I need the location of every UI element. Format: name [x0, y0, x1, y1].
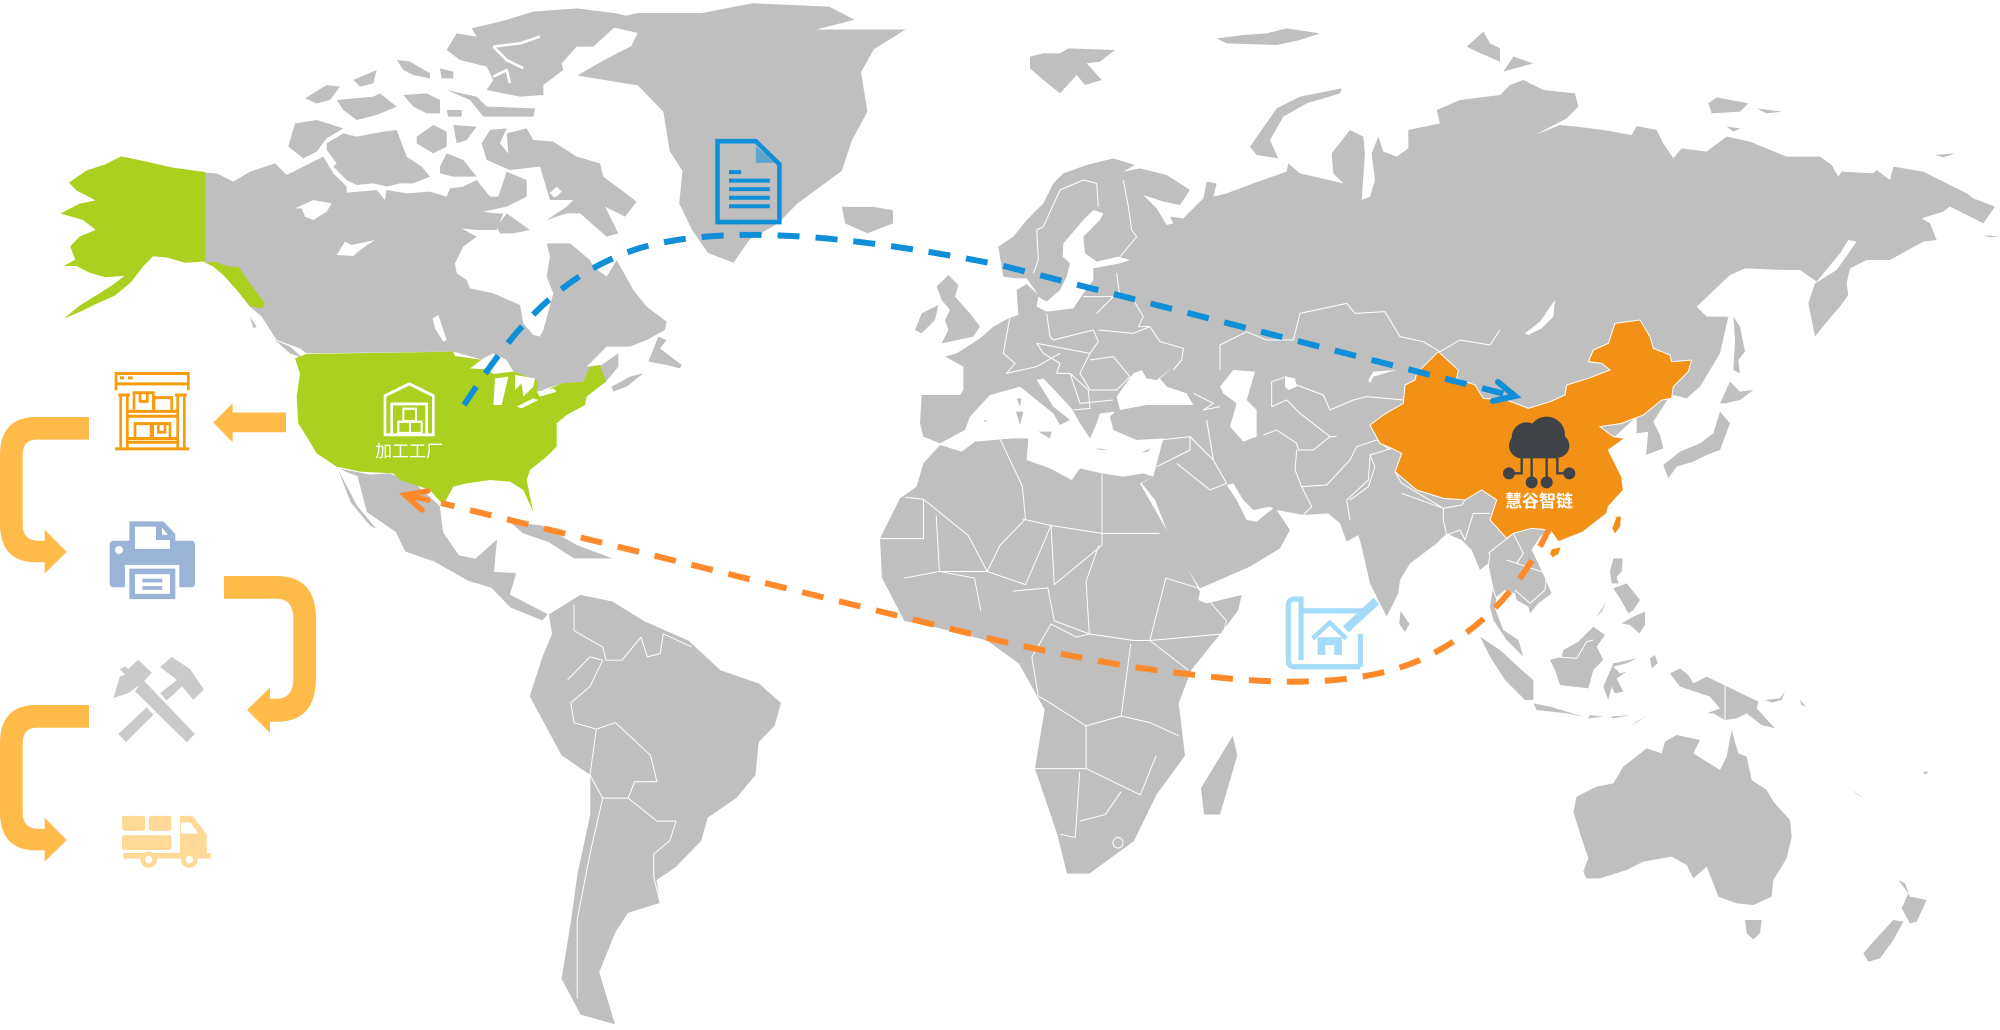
- taiwan: [1612, 517, 1621, 533]
- circuit nodes: [1503, 467, 1575, 488]
- label: processing plant: 加工工厂: [375, 442, 443, 461]
- arrow: printer to tools: [224, 576, 316, 733]
- iceland: [842, 207, 893, 233]
- eurasia: [920, 80, 1995, 657]
- arrow: from plant to warehouse: [213, 403, 286, 442]
- south and southeast asian borders: [1350, 448, 1547, 603]
- circuit connectors: [1509, 457, 1569, 482]
- african borders: [880, 439, 1226, 848]
- canada and arctic islands: [205, 8, 682, 512]
- south america borders: [568, 604, 692, 998]
- label: china hub: 慧谷智链: [1505, 491, 1573, 511]
- sumatra: [1480, 637, 1533, 700]
- arctic ocean islands: [1030, 28, 1500, 158]
- arrow: warehouse to printer: [0, 417, 89, 573]
- svalbard: [1030, 48, 1115, 93]
- blue arrowhead: [1493, 382, 1515, 401]
- franz josef land: [1217, 28, 1320, 45]
- australia: [1573, 730, 1792, 905]
- borders of borneo and new guinea: [1553, 640, 1725, 720]
- southeast asia and oceania: [1480, 558, 1928, 962]
- baja california: [338, 470, 376, 529]
- hainan: [1550, 547, 1561, 557]
- south america: [529, 594, 781, 1025]
- icon: crossed hammers: [113, 657, 204, 742]
- european islands: [915, 275, 1150, 453]
- java and lesser sunda: [1533, 703, 1648, 727]
- philippines: [1597, 558, 1645, 633]
- new zealand: [1863, 880, 1927, 962]
- great britain: [937, 275, 980, 343]
- great lakes: [470, 353, 557, 408]
- canadian arctic islands: [250, 8, 682, 392]
- icon: blueprint house: [1288, 599, 1376, 667]
- borneo: [1550, 627, 1605, 688]
- eurasian borders: [1003, 180, 1500, 520]
- greenland: [577, 3, 906, 263]
- tasmania: [1745, 920, 1762, 939]
- mediterranean islands: [984, 398, 1150, 453]
- contiguous united states: [295, 352, 606, 512]
- cloud shape: [1509, 417, 1569, 458]
- icon: factory building: [385, 384, 433, 435]
- hokkaido: [1720, 382, 1753, 403]
- cuba: [510, 522, 612, 558]
- canada mainland: [205, 157, 667, 393]
- arrow: tools to truck: [0, 705, 89, 862]
- africa borders and madagascar: [880, 439, 1409, 848]
- severnaya zemlya: [1467, 32, 1500, 62]
- americas landmass: [337, 3, 906, 1025]
- left process flow: [0, 373, 433, 868]
- icon: delivery truck: [122, 816, 211, 868]
- icon: document: [718, 141, 779, 222]
- eurasia and africa: [880, 80, 1995, 874]
- honshu and southern japan: [1663, 412, 1730, 478]
- sakhalin: [1733, 317, 1745, 373]
- ireland: [915, 305, 938, 333]
- dashed orange route: [441, 503, 1550, 682]
- africa: [880, 438, 1242, 874]
- icon: printer: [110, 521, 195, 599]
- orange arrowhead: [405, 491, 428, 510]
- new guinea: [1670, 668, 1775, 728]
- madagascar: [1201, 736, 1237, 815]
- alaska: [61, 156, 205, 319]
- arctic channels: [493, 37, 558, 197]
- canadian lakes: [295, 187, 562, 342]
- sulawesi: [1603, 658, 1637, 700]
- dashed blue route: [464, 235, 1505, 405]
- china: [1370, 320, 1692, 557]
- novaya zemlya: [1250, 88, 1342, 158]
- russian far east islands: [1503, 57, 1998, 478]
- icon: cloud network: [1503, 417, 1575, 488]
- alaska panhandle: [205, 262, 265, 308]
- pacific islets: [1650, 655, 1928, 799]
- inland seas and lakes: [1037, 210, 1555, 522]
- sri lanka: [1399, 611, 1409, 632]
- icon: warehouse shelves: [115, 373, 189, 449]
- mexico and central america: [337, 468, 549, 621]
- china mainland: [1370, 320, 1692, 542]
